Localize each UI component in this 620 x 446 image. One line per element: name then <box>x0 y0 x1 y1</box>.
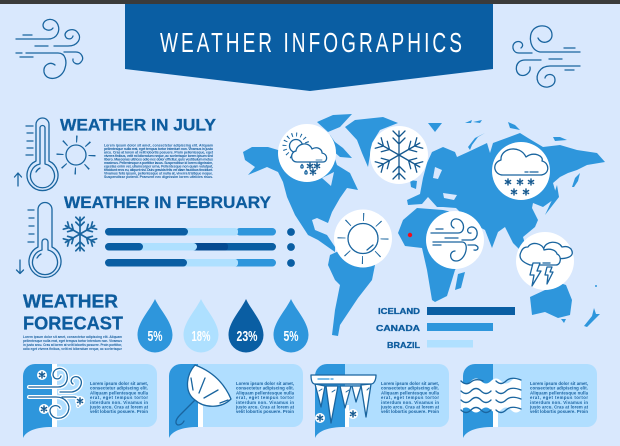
card text: interdum non. Vivamus in <box>236 400 294 405</box>
text block: July: Suspendisse potenti. Praesent nec dignissim lorem ultricies risus. <box>104 175 213 179</box>
weather circle: sun <box>334 210 392 268</box>
card text: Lorem ipsum dolor sit amet, <box>381 381 439 386</box>
icon: umbrella <box>176 365 231 425</box>
card text: consectetur adipiscing elit. <box>90 386 148 391</box>
world map <box>243 114 605 336</box>
heading: weather in July: WEATHER IN JULY <box>60 116 217 134</box>
icon: snowflake small <box>63 217 97 251</box>
drop: 5% <box>138 299 172 352</box>
text block: July: egestas enim vel, ullamcorper urna. Pellentesque non quam volutpat, <box>104 164 213 168</box>
card text: Aliquam pellentesque nulla <box>381 390 440 395</box>
drop: 5% <box>274 299 308 352</box>
panel: icicles <box>311 364 449 438</box>
text block: forecast: odio eget viverra finibus, velit mi bibendum neque, ac scelerisque <box>23 347 122 351</box>
heading: weather forecast: WEATHER <box>23 290 118 312</box>
chart: February stacked bars <box>105 228 295 267</box>
label: Brazil: BRAZIL <box>387 340 420 350</box>
icon: sun small <box>60 139 92 171</box>
icon: wind left <box>16 19 83 78</box>
card text: velit lobortis posuere. Proin <box>530 409 588 414</box>
text block: July <box>104 144 214 179</box>
text block: forecast: in justo arcu. Cras at lorem at velit lobortis posuere. Proin porttitor, <box>23 343 122 347</box>
card text: justo arcu. Cras at lorem at <box>529 404 589 410</box>
weather circle: snow cloud <box>492 142 550 200</box>
card text: Lorem ipsum dolor sit amet, <box>90 381 148 386</box>
bar 2 <box>105 243 276 250</box>
drop: 23% <box>228 299 264 352</box>
text block: July: arcu. Cras at lorem at velit lobortis posuere. Proin pellentesque, eget <box>104 150 214 154</box>
text block: July: Vivamus felis ipsum, pellentesque ut nulla at, viverra tristique neque. <box>104 172 213 176</box>
icon: icicle snowflakes <box>315 409 358 423</box>
text block: July: viverra finibus, velit mi bibendum neque, ac scelerisque lorem ipsum sed <box>104 154 213 158</box>
card text: consectetur adipiscing elit. <box>236 386 294 391</box>
bar 1 <box>105 228 276 236</box>
icon: waves <box>461 378 521 412</box>
card text: velit lobortis posuere. Proin <box>236 409 294 414</box>
text block: forecast: Lorem ipsum dolor sit amet, consectetur adipiscing elit. Aliquam <box>23 335 122 339</box>
text block: July: libero. Maecenas ultrices odio nec dolor efficitur, quis vestibulum metus <box>104 158 213 162</box>
card text <box>380 381 440 414</box>
weather circle: sun and cloud with rain and snow <box>278 124 336 182</box>
card text: consectetur adipiscing elit. <box>381 386 439 391</box>
top editor bar <box>0 0 620 4</box>
bar: Iceland <box>427 307 515 315</box>
card text: Lorem ipsum dolor sit amet, <box>236 381 294 386</box>
card text: interdum non. Vivamus in <box>381 400 439 405</box>
bar: Brazil <box>427 340 473 348</box>
text block: forecast <box>23 335 122 351</box>
icon: thermometer down <box>16 203 61 277</box>
card text: Aliquam pellentesque nulla <box>530 390 589 395</box>
card text: velit lobortis posuere. Proin <box>90 409 148 414</box>
weather circle: snowflake <box>370 126 428 184</box>
text block: July: pellentesque nulla erat, eget tempus tortor interdum non. Vivamus in justo <box>104 147 213 151</box>
drop: 18% <box>184 299 218 352</box>
icon: wind with snow <box>29 368 85 418</box>
card text: justo arcu. Cras at lorem at <box>89 404 149 410</box>
card text: Aliquam pellentesque nulla <box>236 390 295 395</box>
card text: justo arcu. Cras at lorem at <box>235 404 295 410</box>
title: WEATHER INFOGRAPHICS <box>160 27 462 59</box>
card text: erat, eget tempus tortor <box>530 395 588 400</box>
legend: countries <box>376 306 515 350</box>
icon: wind right <box>513 26 580 87</box>
bar 3 <box>105 259 276 266</box>
panel: windy snow <box>23 364 157 438</box>
drop: 18%: 18% <box>192 328 210 345</box>
text block: July: maximus. Pellentesque a porttitor lacus. Suspendisse id lorem dignissim, <box>104 161 213 165</box>
icon: icicles <box>311 375 376 423</box>
card text: erat, eget tempus tortor <box>381 395 439 400</box>
weather circle: thunderstorm <box>516 232 574 290</box>
card text: interdum non. Vivamus in <box>90 400 148 405</box>
title banner <box>125 4 493 91</box>
text block: forecast: pellentesque nulla erat, eget tempus tortor interdum non. Vivamus <box>23 339 122 343</box>
bar markers <box>287 228 295 267</box>
drop: 5%: 5% <box>148 328 162 345</box>
heading: weather in February: WEATHER IN FEBRUARY <box>64 193 272 212</box>
marker: red dot <box>408 233 412 237</box>
drop: 23%: 23% <box>236 328 258 345</box>
card text: erat, eget tempus tortor <box>236 395 294 400</box>
icon: thermometer up <box>14 118 58 191</box>
bar: Canada <box>427 323 493 331</box>
heading: weather forecast <box>23 290 124 334</box>
text block: July: Lorem ipsum dolor sit amet, consectetur adipiscing elit. Aliquam <box>104 144 213 148</box>
card text: velit lobortis posuere. Proin <box>381 409 439 414</box>
card text: Aliquam pellentesque nulla <box>90 390 149 395</box>
card text: justo arcu. Cras at lorem at <box>380 404 440 410</box>
heading: weather forecast: FORECAST <box>23 312 124 334</box>
card text: interdum non. Vivamus in <box>530 400 588 405</box>
panel: waves <box>461 364 597 438</box>
card text <box>529 381 589 414</box>
card text: erat, eget tempus tortor <box>90 395 148 400</box>
label: Iceland: ICELAND <box>378 306 420 316</box>
card text <box>235 381 295 414</box>
card text: consectetur adipiscing elit. <box>530 386 588 391</box>
weather circle: wind <box>426 211 484 269</box>
card text <box>89 381 149 414</box>
label: Canada: CANADA <box>376 323 420 333</box>
panel: umbrella <box>169 364 303 438</box>
drop: 5%: 5% <box>284 328 298 345</box>
card text: Lorem ipsum dolor sit amet, <box>530 381 588 386</box>
text block: July: tincidunt eros eu, aliquet nisi. Duis gravida felis vel diam faucibus tincidunt. <box>104 168 213 172</box>
